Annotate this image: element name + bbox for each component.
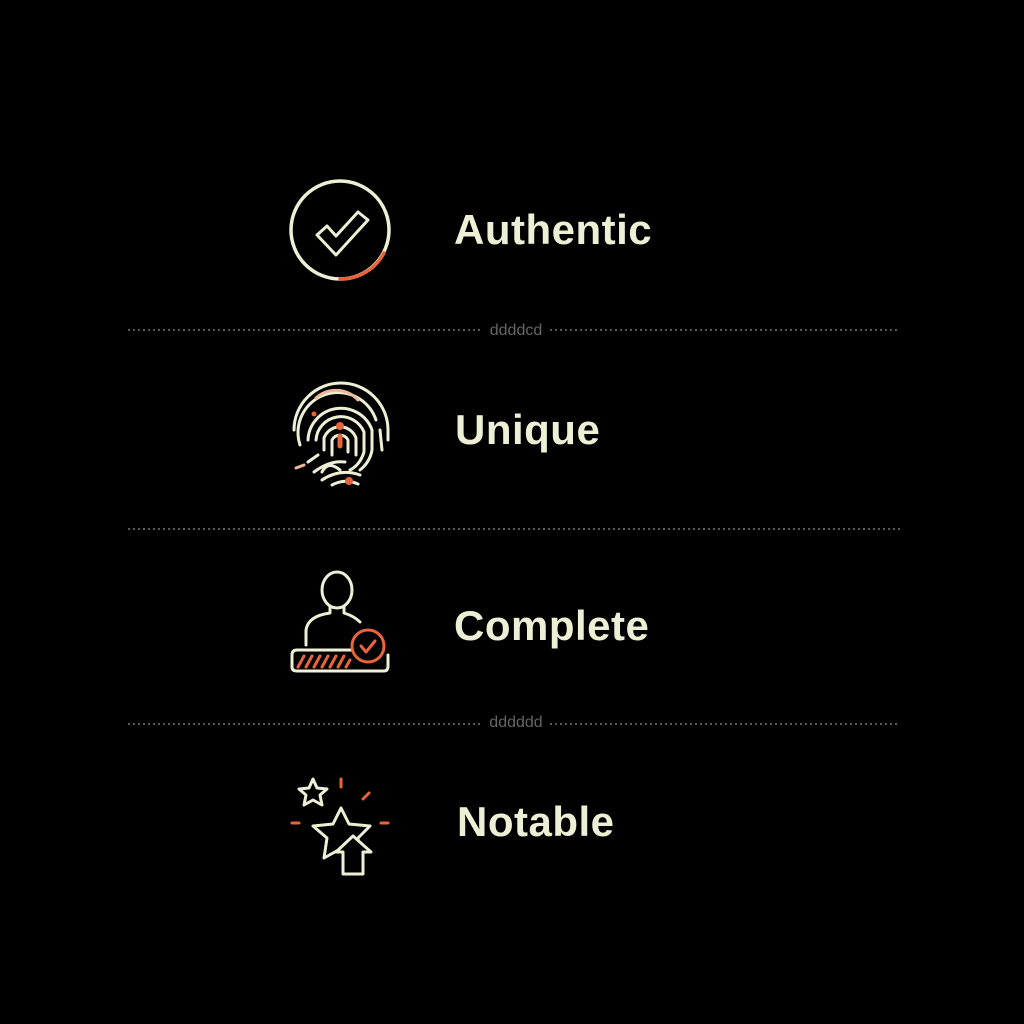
divider 2 [128,528,900,530]
divider 1: ddddcd [490,322,542,339]
label: Notable: Notable [457,798,615,845]
icon: star with arrow [292,779,388,874]
label: Authentic: Authentic [454,206,652,253]
divider 3: dddddd [489,714,543,731]
label: Unique: Unique [455,406,600,453]
icon: checkmark circle [291,181,389,279]
icon: fingerprint [294,383,388,485]
icon: profile complete [292,572,388,671]
label: Complete: Complete [454,602,649,649]
